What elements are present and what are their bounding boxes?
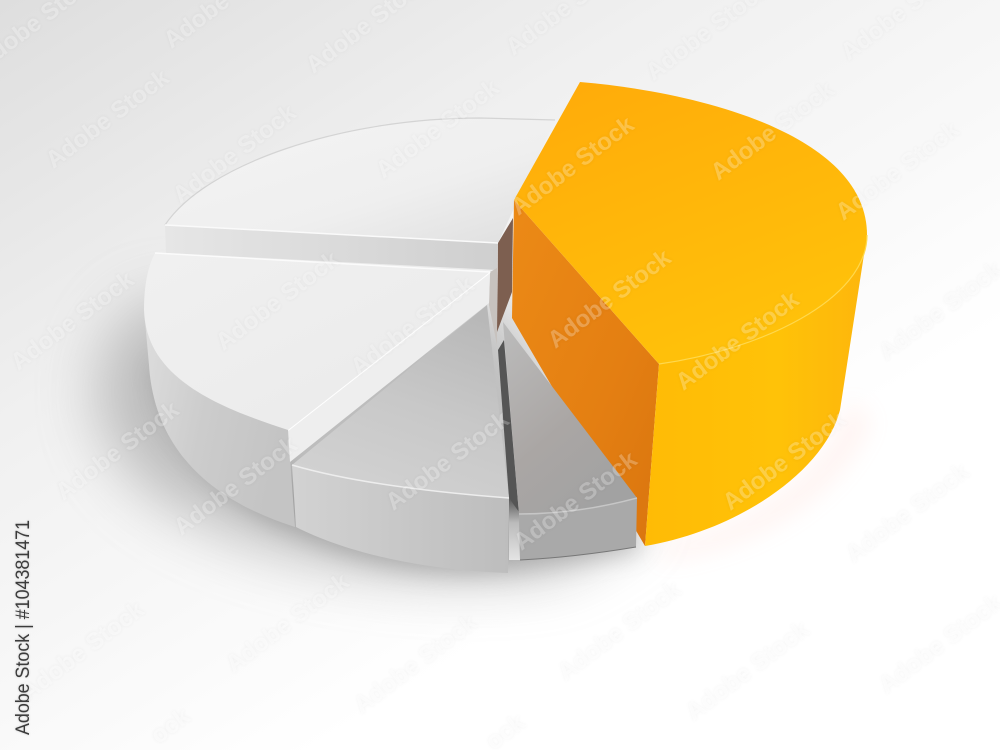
watermarks: Adobe Stock: [681, 616, 815, 726]
watermarks: ock: [146, 702, 196, 749]
slice: middle grey: [292, 305, 509, 573]
watermarks: Adobe Stock: [506, 111, 640, 221]
watermarks: Adobe Stock: [706, 76, 840, 186]
slice: back white: [165, 118, 555, 345]
watermarks: Adobe Stock: [841, 458, 975, 568]
slice: small grey: [503, 322, 637, 560]
watermarks: Adobe Stock: [51, 396, 185, 506]
watermarks: Adobe Stock: [553, 576, 687, 686]
watermarks: Adobe Stock: [6, 266, 140, 376]
watermarks: Adobe Stock: [211, 246, 345, 356]
watermarks: Adobe Stock: [671, 286, 805, 396]
watermarks: Adobe Stock: [349, 609, 483, 719]
watermarks: Adobe Stock: [168, 99, 302, 209]
watermarks: Adobe Stock: [831, 116, 965, 226]
watermarks: Adobe Stock: [371, 74, 505, 184]
watermarks: Adobe Stock: [16, 596, 150, 706]
side label: stock number: Adobe Stock | #104381471: [13, 520, 34, 735]
watermarks: Adobe Stock: [509, 446, 643, 556]
watermarks: Adobe Stock: [41, 64, 175, 174]
watermarks: Adobe Stock: [169, 431, 303, 541]
gap between slices: [498, 340, 520, 560]
watermarks: Adobe Stock: [346, 271, 480, 381]
pie chart: [144, 82, 867, 573]
slice: left white: [144, 253, 490, 527]
watermarks: Adobe Stock: [543, 244, 677, 354]
watermarks: Adobe Stock: [381, 406, 515, 516]
watermarks: Adobe Stock: [718, 406, 852, 516]
slice: orange highlighted: [512, 82, 867, 546]
watermarks: Adobe Stock: [221, 568, 355, 678]
cast shadow: [97, 300, 870, 576]
